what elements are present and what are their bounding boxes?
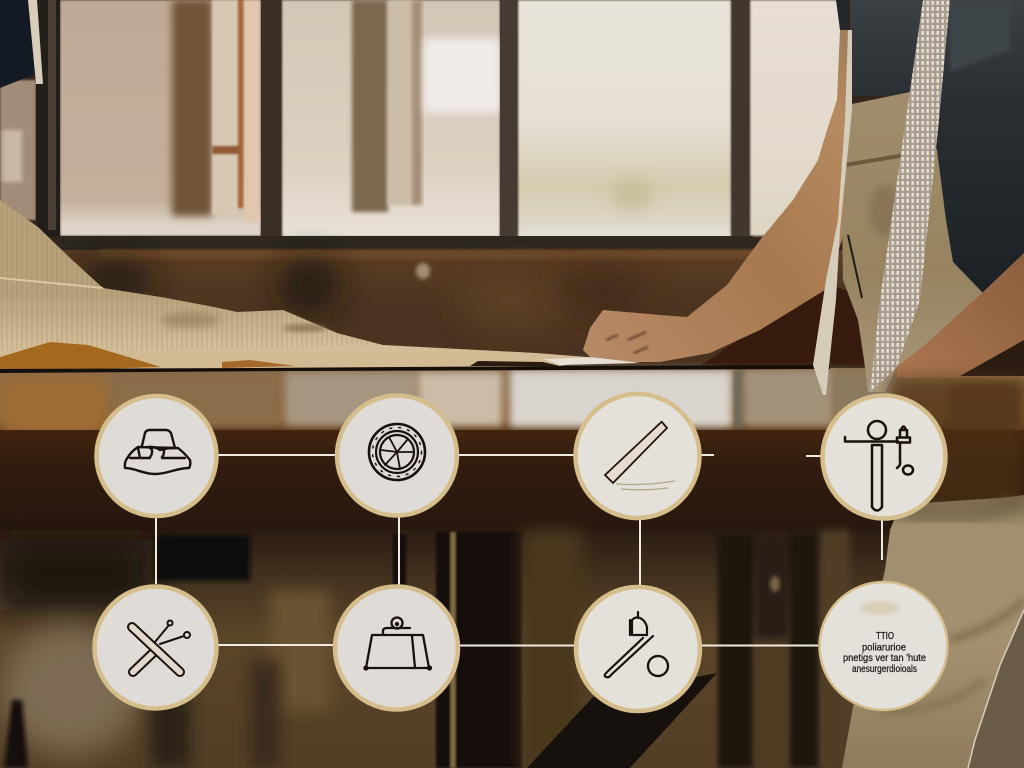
table reflection — [0, 368, 1024, 438]
node: hat icon — [96, 396, 216, 516]
caption text — [843, 630, 926, 675]
icon: hat — [125, 430, 190, 474]
caption text: TTIO — [876, 630, 894, 642]
lower workshop — [0, 530, 1024, 768]
apron tie strip — [813, 30, 852, 395]
node: crossed tools icon — [94, 586, 216, 708]
icon: tool stand — [845, 421, 913, 510]
icon: chisel and saw disc — [605, 612, 668, 677]
node: tool stand icon — [822, 396, 946, 518]
connector lines — [156, 455, 882, 646]
trousers — [842, 378, 1024, 768]
cloth on table — [0, 200, 830, 373]
icon: ruler — [605, 422, 675, 490]
dark table band — [0, 430, 1024, 535]
caption text: pnetigs ver tan 'hute — [843, 652, 926, 664]
right forearm — [897, 253, 1024, 378]
node: wheel icon — [337, 396, 457, 516]
caption text: poliarurioe — [862, 642, 906, 654]
node: bench icon — [335, 586, 458, 710]
caption text: anesurgerdioioals — [852, 663, 917, 675]
icon: bench — [364, 618, 431, 670]
node: ruler icon — [576, 394, 700, 518]
node: chisel icon — [576, 587, 700, 711]
right forearm shadow — [960, 340, 1024, 376]
arm and hand — [583, 30, 848, 362]
apron and shirt figure — [836, 0, 1024, 392]
icon: crossed tools — [132, 620, 190, 672]
window sill — [60, 250, 870, 366]
dotted strap — [870, 0, 950, 393]
icon: wheel — [369, 424, 425, 480]
window scene — [0, 0, 1024, 262]
node: text caption — [820, 582, 948, 710]
